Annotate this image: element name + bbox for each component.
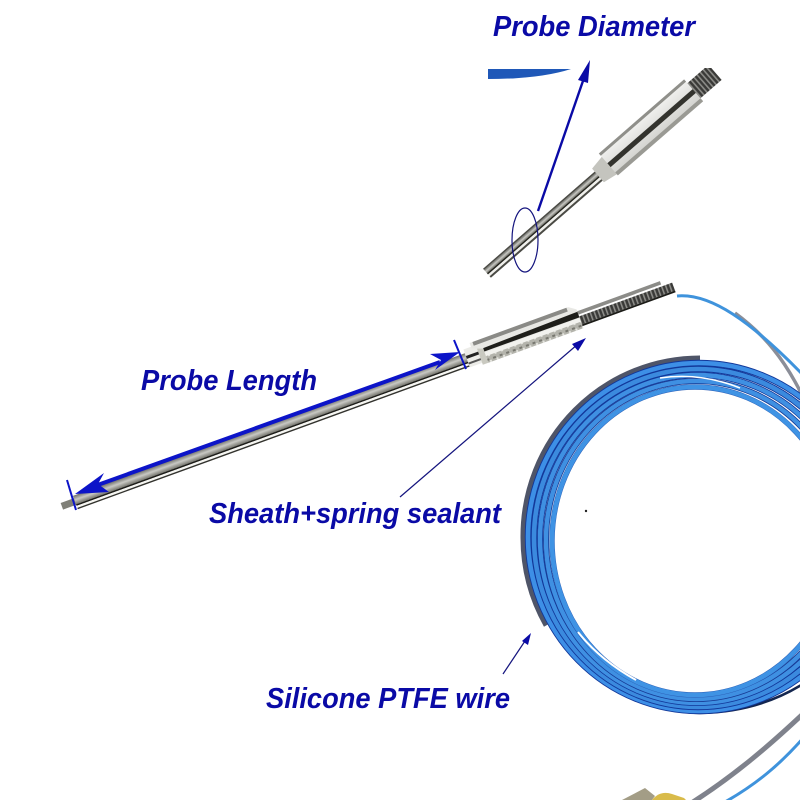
- arrow shaft: [92, 362, 440, 487]
- lower gray wire: [693, 712, 800, 800]
- right arrowhead: [430, 352, 460, 370]
- right tick: [454, 340, 466, 369]
- inset fragment: blue wire sliver: [488, 69, 571, 79]
- inset probe photo: [476, 61, 724, 282]
- arrow: diameter pointer: [538, 60, 590, 211]
- ellipse: diameter marker: [512, 208, 538, 272]
- sheath: [470, 305, 583, 366]
- arrow: wire pointer: [503, 633, 531, 674]
- collar: [463, 343, 488, 369]
- wire coil: [524, 359, 800, 713]
- second blue wire: [534, 369, 800, 707]
- inset collar: [590, 155, 619, 184]
- outer blue wire: [528, 363, 800, 711]
- inset sheath: [599, 79, 703, 175]
- stray dot: [585, 510, 587, 512]
- dark outer edge lower left: [540, 600, 800, 713]
- gray wire lower right: [680, 650, 800, 697]
- probe thin rod: [73, 353, 470, 509]
- third blue wire: [540, 375, 800, 703]
- white mask above inset: [600, 40, 800, 68]
- gray wire upper left: [524, 359, 700, 625]
- main probe photo: [57, 271, 676, 517]
- white gaps between wires: [540, 402, 568, 448]
- inner blue wire: [552, 387, 800, 695]
- inset threaded end: [687, 65, 722, 98]
- arrow: sheath pointer: [400, 338, 586, 497]
- connector: [622, 788, 686, 800]
- inset thin rod: [483, 170, 604, 278]
- heading: Probe Diameter: Probe Diameter: [493, 11, 697, 43]
- label: Silicone PTFE wire: Silicone PTFE wire: [266, 683, 510, 715]
- threaded spring end: [577, 277, 676, 326]
- dimension: probe length: [67, 340, 466, 510]
- fourth blue wire: [546, 381, 800, 699]
- left tick: [67, 480, 76, 510]
- label: Sheath+spring sealant: Sheath+spring sealant: [209, 498, 502, 530]
- lower blue wire: [725, 736, 800, 800]
- left arrowhead: [75, 473, 109, 494]
- gray wire from probe: [735, 313, 800, 397]
- probe tip: [61, 498, 78, 510]
- blue wire from probe: [677, 296, 800, 378]
- label: Probe Length: Probe Length: [141, 365, 317, 397]
